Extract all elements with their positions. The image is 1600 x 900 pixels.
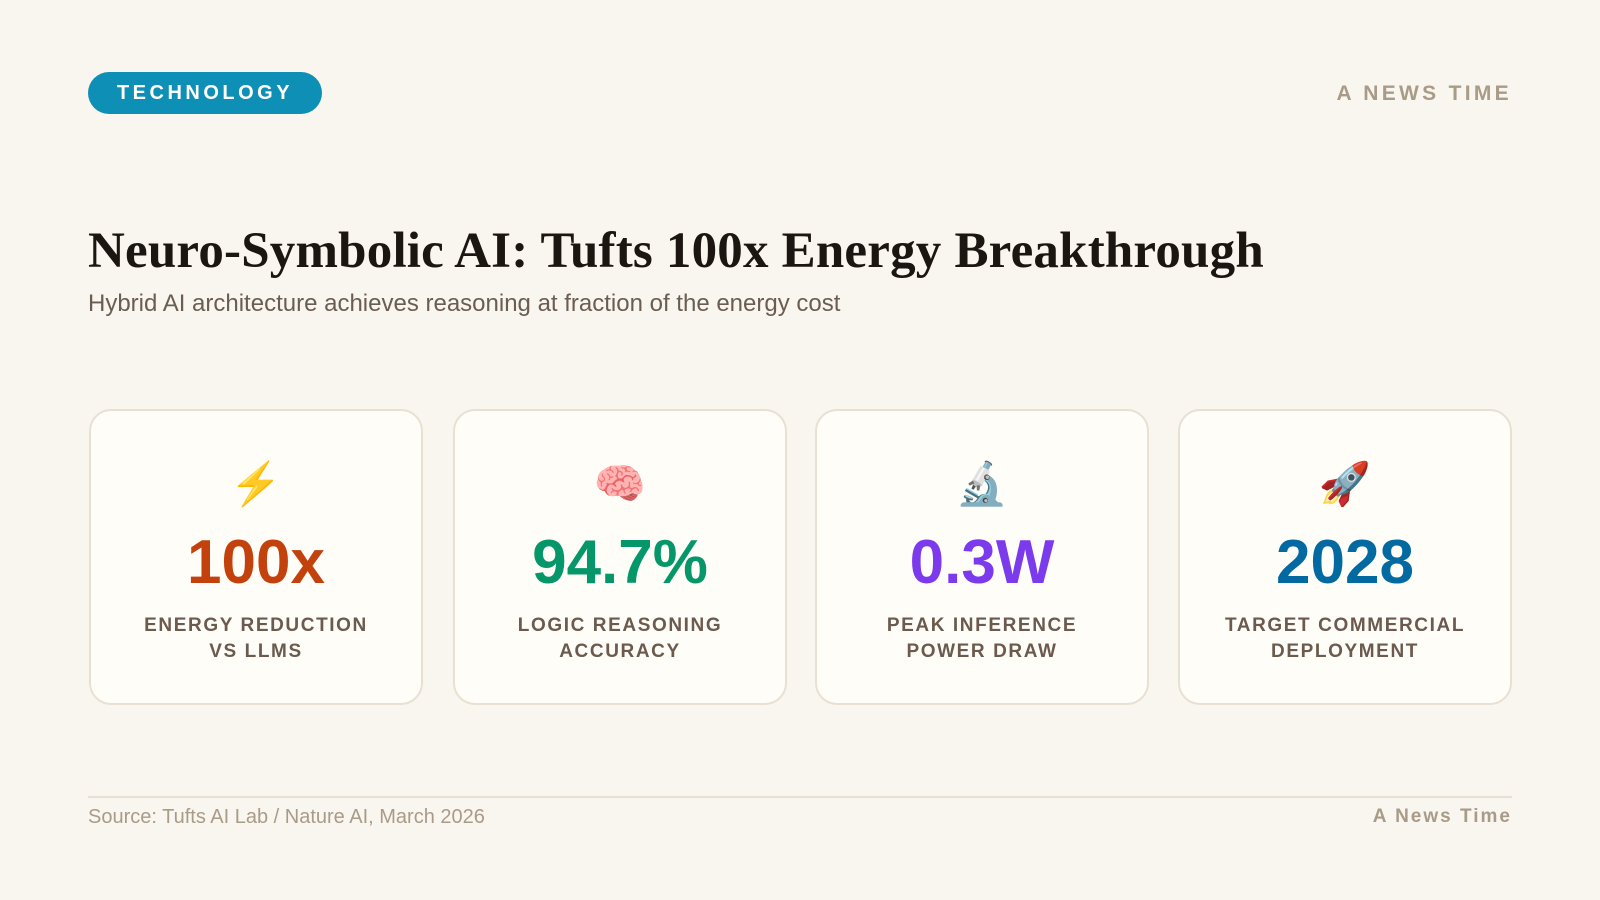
label bbox=[1225, 615, 1465, 662]
category pill bbox=[88, 72, 322, 114]
icon: rocket: 🚀 bbox=[1319, 460, 1371, 507]
label bbox=[144, 615, 368, 662]
panel: accuracy bbox=[453, 409, 787, 705]
label: TARGET COMMERCIAL bbox=[1225, 615, 1465, 636]
icon: lightning: ⚡ bbox=[230, 460, 282, 507]
label: ENERGY REDUCTION bbox=[144, 615, 368, 636]
label: LOGIC REASONING bbox=[518, 615, 722, 636]
label: PEAK INFERENCE bbox=[887, 615, 1077, 636]
label: DEPLOYMENT bbox=[1271, 641, 1419, 662]
icon: microscope: 🔬 bbox=[956, 460, 1008, 507]
label: VS LLMS bbox=[209, 641, 303, 662]
label: POWER DRAW bbox=[906, 641, 1058, 662]
title: Neuro-Symbolic AI: Tufts 100x Energy Breakthrough bbox=[88, 223, 1264, 279]
panel: power draw bbox=[815, 409, 1149, 705]
label: ACCURACY bbox=[559, 641, 681, 662]
stat: 0.3W: 0.3W bbox=[910, 528, 1054, 597]
footer brand: A News Time bbox=[1373, 806, 1512, 827]
label bbox=[518, 615, 722, 662]
category pill: TECHNOLOGY bbox=[117, 82, 293, 104]
subtitle: Hybrid AI architecture achieves reasoning at fraction of the energy cost bbox=[88, 290, 840, 317]
stat: 2028: 2028 bbox=[1276, 528, 1414, 597]
panel: energy reduction bbox=[89, 409, 423, 705]
brand: A NEWS TIME bbox=[1336, 82, 1512, 105]
panel: deployment bbox=[1178, 409, 1512, 705]
icon: brain: 🧠 bbox=[594, 460, 646, 507]
label bbox=[887, 615, 1077, 662]
source: Source: Tufts AI Lab / Nature AI, March 2026 bbox=[88, 806, 485, 828]
stat: 94.7%: 94.7% bbox=[532, 528, 708, 597]
stat: 100x: 100x bbox=[187, 528, 325, 597]
